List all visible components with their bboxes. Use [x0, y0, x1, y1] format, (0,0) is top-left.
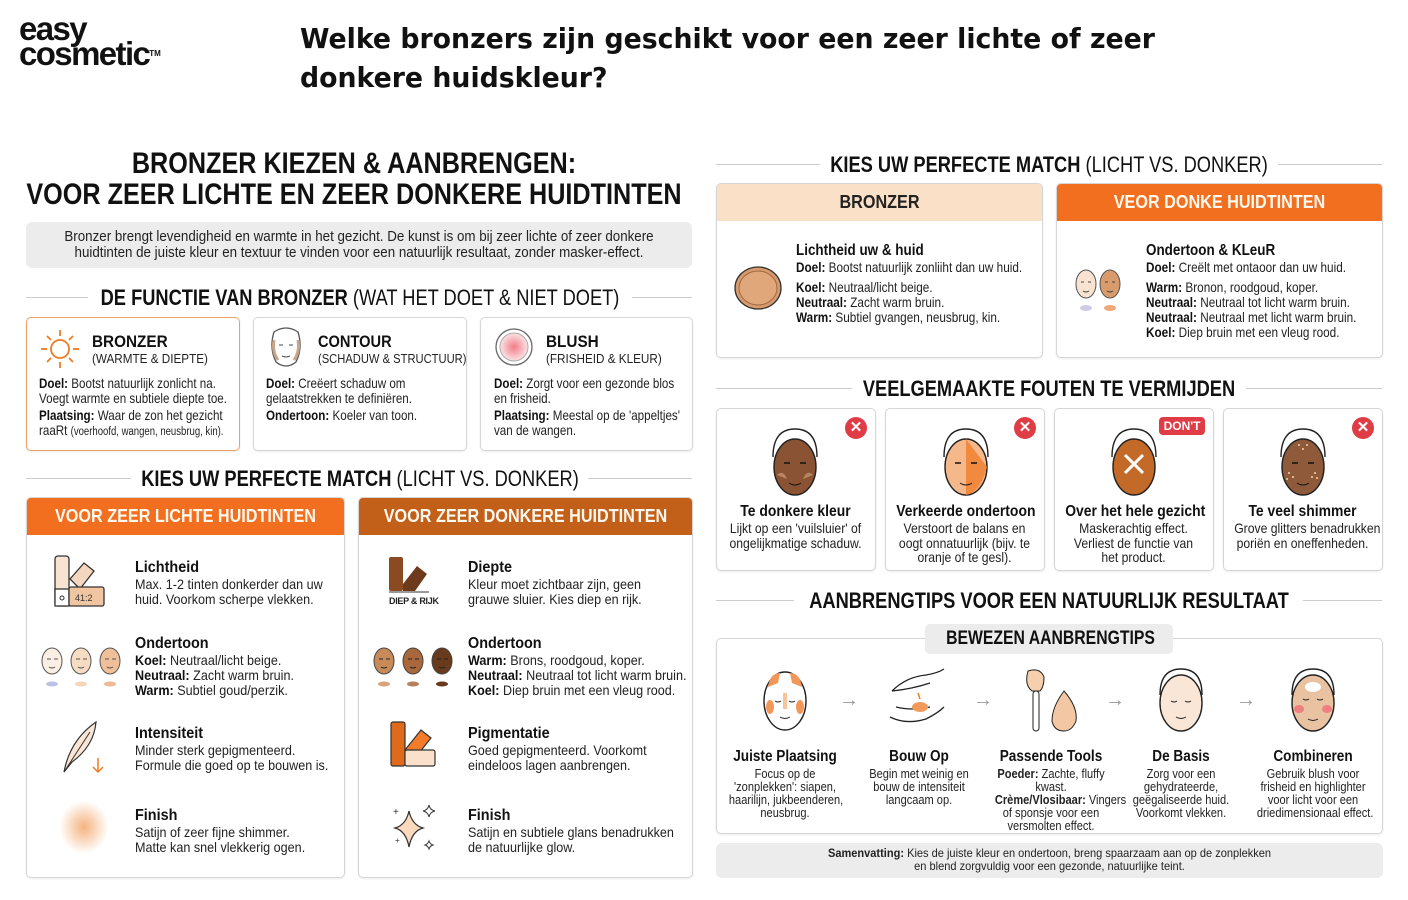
panel: bronzer match [716, 183, 1043, 358]
icon: orange face [943, 428, 989, 496]
panel: veor donke huidtinten: Ondertoon & KLeuR [1146, 242, 1275, 259]
panel: zeer lichte huidtinten: Ondertoon [135, 635, 209, 652]
icon: feather [63, 720, 104, 773]
page title: donkere huidskleur? [300, 61, 608, 94]
icon: bronzer compact [734, 266, 782, 310]
panel: zeer lichte huidtinten: Warm: Subtiel goud/perzik. [135, 682, 288, 698]
card: verkeerde ondertoon: Verstoort de balans en [904, 520, 1025, 536]
icon: dont badge: DON'T [1164, 419, 1200, 433]
arrow: → [839, 689, 859, 711]
panel: zeer lichte huidtinten: Lichtheid [135, 559, 199, 576]
arrow: → [1105, 689, 1125, 711]
icon: blush compact [495, 328, 533, 366]
panel: zeer lichte huidtinten [26, 497, 345, 878]
icon: orange swatch [390, 721, 436, 767]
panel: bewezen aanbrengtips: geëgaliseerde huid. [1133, 792, 1229, 807]
icon: three light faces [42, 648, 120, 686]
panel: zeer donkere huidtinten: eindeloos lagen aanbrengen. [468, 757, 631, 773]
heading: functie van bronzer: DE FUNCTIE VAN BRONZER (WAT HET DOET & NIET DOET) [101, 285, 619, 310]
card: over het hele gezicht: Maskerachtig effect. [1079, 520, 1188, 536]
icon: sparkles: + [393, 807, 399, 818]
panel: zeer lichte huidtinten: Minder sterk gepigmenteerd. [135, 742, 295, 758]
card: blush [480, 317, 693, 451]
heading: kies uw perfecte match (left): KIES UW PERFECTE MATCH (LICHT VS. DONKER) [141, 466, 579, 491]
panel: veor donke huidtinten: VEOR DONKE HUIDTINTEN [1114, 192, 1325, 212]
card: verkeerde ondertoon: oranje of te gesl). [917, 549, 1012, 565]
summary box [716, 843, 1383, 878]
card: contour: Ondertoon: Koeler van toon. [266, 407, 417, 423]
panel: zeer lichte huidtinten: Formule die goed op te bouwen is. [135, 757, 328, 773]
card: over het hele gezicht: het product. [1101, 549, 1166, 565]
panel: zeer donkere huidtinten: de natuurlijke glow. [468, 839, 575, 855]
heading: kies uw perfecte match (right): KIES UW PERFECTE MATCH (LICHT VS. DONKER) [830, 152, 1268, 177]
icon: three dark faces [374, 648, 452, 686]
panel: zeer lichte huidtinten: Koel: Neutraal/licht beige. [135, 652, 281, 668]
icon: sparkles: + [395, 836, 400, 845]
panel: veor donke huidtinten: Koel: Diep bruin met een vleug rood. [1146, 324, 1339, 340]
panel: bewezen aanbrengtips: Voorkomt vlekken. [1136, 805, 1226, 820]
panel: zeer lichte huidtinten: Max. 1-2 tinten donkerder dan uw [135, 576, 323, 592]
card: contour: gelaatstrekken te definiëren. [266, 390, 412, 406]
panel: bewezen aanbrengtips: voor licht voor een [1268, 792, 1358, 807]
panel: bewezen aanbrengtips: versmolten effect. [1007, 818, 1095, 833]
panel: bewezen aanbrengtips: Juiste Plaatsing [733, 748, 837, 765]
icon: dark swatch: DIEP & RIJK [389, 596, 440, 606]
page title [300, 22, 1155, 94]
card: te veel shimmer: poriën en oneffenheden. [1237, 534, 1368, 550]
card: te veel shimmer: Te veel shimmer [1248, 503, 1357, 520]
panel: bewezen aanbrengtips: haarilijn, jukbeenderen, [729, 792, 843, 807]
card: bronzer: Voegt warmte en subtiele diepte toe. [39, 390, 227, 406]
text: Bronzer brengt levendigheid en warmte in het gezicht. De kunst is om bij zeer lichte of zeer donkere [64, 228, 654, 245]
panel: zeer donkere huidtinten: Ondertoon [468, 635, 542, 652]
panel: bewezen aanbrengtips: driedimensionaal effect. [1257, 805, 1373, 820]
step: bouw op [890, 668, 944, 722]
panel: zeer donkere huidtinten: Pigmentatie [468, 725, 550, 742]
icon: two faces [1076, 270, 1120, 311]
icon: sun [41, 330, 79, 368]
arrow: → [1236, 689, 1256, 711]
panel: bronzer match: BRONZER [839, 192, 920, 212]
card: over het hele gezicht: Over het hele gezicht [1065, 503, 1205, 520]
panel: bewezen aanbrengtips: gehydrateerde, [1144, 779, 1218, 794]
main heading [26, 147, 682, 211]
panel: zeer donkere huidtinten: VOOR ZEER DONKERE HUIDTINTEN [384, 506, 667, 526]
card: blush: BLUSH [546, 332, 599, 351]
panel: bewezen aanbrengtips: Passende Tools [1000, 748, 1102, 765]
panel: zeer lichte huidtinten: Intensiteit [135, 725, 203, 742]
icon: dark face [772, 428, 818, 496]
icon: sparkles [392, 804, 436, 850]
panel: zeer donkere huidtinten [358, 497, 693, 878]
logo: cosmeticTM [19, 35, 161, 72]
logo: easy [19, 10, 86, 47]
main heading: BRONZER KIEZEN & AANBRENGEN: [132, 147, 576, 180]
panel: bewezen aanbrengtips: 'zonplekken': siapen, [734, 779, 836, 794]
icon: contour face [271, 327, 301, 367]
card: blush: van de wangen. [494, 422, 576, 438]
panel: zeer lichte huidtinten: Matte kan snel vlekkerig ogen. [135, 839, 305, 855]
panel: zeer lichte huidtinten: Satijn of zeer fijne shimmer. [135, 824, 290, 840]
icon: x badge: ✕ [1019, 419, 1031, 436]
panel: zeer donkere huidtinten: Diepte [468, 559, 512, 576]
tab heading [925, 624, 1173, 654]
card: te donkere kleur: Te donkere kleur [740, 503, 851, 520]
card: te veel shimmer: Grove glitters benadrukken [1234, 520, 1380, 536]
panel: bewezen aanbrengtips [716, 638, 1383, 834]
card: bronzer: Doel: Bootst natuurlijk zonlicht na. [39, 375, 216, 391]
icon: x badge [845, 417, 867, 439]
page title: Welke bronzers zijn geschikt voor een zeer lichte of zeer [300, 22, 1155, 55]
card: bronzer: BRONZER [92, 332, 168, 351]
panel: bewezen aanbrengtips: Focus op de [755, 766, 815, 781]
panel: bewezen aanbrengtips: kwast. [1035, 779, 1067, 794]
card: blush: Plaatsing: Meestal op de 'appeltjes' [494, 407, 680, 423]
tab heading: BEWEZEN AANBRENGTIPS [946, 628, 1155, 649]
card: te donkere kleur: Lijkt op een 'vuilsluier' of [730, 520, 861, 536]
card: contour: Doel: Creëert schaduw om [266, 375, 405, 391]
arrow: → [973, 689, 993, 711]
card: over het hele gezicht [1054, 408, 1214, 571]
panel: bewezen aanbrengtips: Zorg voor een [1147, 766, 1215, 781]
panel: bronzer match: Warm: Subtiel gvangen, neusbrug, kin. [796, 309, 1000, 325]
text: Samenvatting: Kies de juiste kleur en ondertoon, breng spaarzaam aan op de zonplekken [828, 846, 1271, 860]
panel: bewezen aanbrengtips: Bouw Op [889, 748, 949, 765]
icon: x badge: ✕ [850, 419, 862, 436]
icon: masked face [1111, 428, 1157, 496]
panel: veor donke huidtinten: Neutraal: Neutraal tot licht warm bruin. [1146, 294, 1350, 310]
panel: bewezen aanbrengtips: of sponsje voor een [1003, 805, 1099, 820]
icon: shimmer face [1280, 428, 1326, 496]
card: blush: Doel: Zorgt voor een gezonde blos [494, 375, 674, 391]
text: en blend zorgvuldig voor een gezonde, natuurlijke teint. [914, 859, 1185, 873]
panel: bronzer match: Doel: Bootst natuurlijk zonliiht dan uw huid. Koel: Neutraal/licht beige. [796, 259, 1022, 295]
panel: bewezen aanbrengtips: Crème/Vlosibaar: Vingers [995, 792, 1126, 807]
icon: finish glow [59, 800, 109, 854]
panel: bewezen aanbrengtips: neusbrug. [760, 805, 810, 820]
main heading: VOOR ZEER LICHTE EN ZEER DONKERE HUIDTINTEN [26, 178, 682, 211]
panel: bewezen aanbrengtips: frisheid en highlighter [1260, 779, 1366, 794]
card: verkeerde ondertoon: oogt onnatuurlijk (bijv. te [899, 534, 1030, 550]
panel: bewezen aanbrengtips: bouw de intensiteit [873, 779, 965, 794]
card: over het hele gezicht: Verliest de functie van [1074, 534, 1193, 550]
logo [19, 10, 161, 72]
card: te donkere kleur [716, 408, 876, 571]
intro text box [26, 222, 692, 268]
panel: zeer donkere huidtinten: Satijn en subtiele glans benadrukken [468, 824, 674, 840]
panel: veor donke huidtinten [1056, 183, 1383, 358]
card: blush: (FRISHEID & KLEUR) [546, 351, 662, 366]
text: huidtinten de juiste kleur en textuur te vinden voor een natuurlijk resultaat, zonder masker-effect. [75, 244, 643, 261]
panel: zeer lichte huidtinten: huid. Voorkom scherpe vlekken. [135, 591, 314, 607]
panel: zeer donkere huidtinten: Neutraal: Neutraal tot licht warm bruin. [468, 667, 686, 683]
heading: veelgemaakte fouten: VEELGEMAAKTE FOUTEN TE VERMIJDEN [863, 376, 1235, 401]
panel: zeer lichte huidtinten: VOOR ZEER LICHTE HUIDTINTEN [55, 506, 316, 526]
panel: bewezen aanbrengtips: Gebruik blush voor [1267, 766, 1359, 781]
panel: veor donke huidtinten: Neutraal: Neutraal met licht warm bruin. [1146, 309, 1356, 325]
panel: zeer donkere huidtinten: Warm: Brons, roodgoud, koper. [468, 652, 645, 668]
card: bronzer: (WARMTE & DIEPTE) [92, 351, 208, 366]
step: juiste plaatsing [763, 671, 807, 731]
panel: bronzer match: Lichtheid uw & huid [796, 242, 924, 259]
panel: zeer lichte huidtinten: Finish [135, 807, 177, 824]
icon: x badge [1014, 417, 1036, 439]
step: combineren [1291, 668, 1335, 732]
card: bronzer: Plaatsing: Waar de zon het gezicht [39, 407, 223, 423]
card: verkeerde ondertoon: Verkeerde ondertoon [896, 503, 1035, 520]
panel: zeer donkere huidtinten: Goed gepigmenteerd. Voorkomt [468, 742, 647, 758]
icon: dark swatch [389, 557, 440, 606]
panel: zeer donkere huidtinten: Koel: Diep bruin met een vleug rood. [468, 682, 675, 698]
icon: dont badge [1159, 417, 1205, 435]
step: passende tools [1026, 669, 1077, 732]
panel: bewezen aanbrengtips: Begin met weinig en [869, 766, 969, 781]
card: contour: CONTOUR [318, 332, 392, 351]
step: de basis [1159, 668, 1203, 732]
panel: bewezen aanbrengtips: langcaam op. [886, 792, 952, 807]
card: bronzer [26, 317, 240, 451]
icon: x badge: ✕ [1357, 419, 1369, 436]
panel: bronzer match: Neutraal: Zacht warm bruin. [796, 294, 944, 310]
panel: veor donke huidtinten: Doel: Creëlt met ontaoor dan uw huid. Warm: Bronon, roodgoud, koper. [1146, 259, 1346, 295]
card: te donkere kleur: ongelijkmatige schaduw. [729, 534, 862, 550]
icon: light swatch [54, 555, 105, 607]
panel: bewezen aanbrengtips: Poeder: Zachte, fluffy [997, 766, 1105, 781]
heading: aanbrengtips: AANBRENGTIPS VOOR EEN NATUURLIJK RESULTAAT [809, 588, 1289, 613]
card: bronzer: raaRt (voerhoofd, wangen, neusbrug, kin). [39, 422, 223, 438]
card: verkeerde ondertoon [885, 408, 1045, 571]
panel: bewezen aanbrengtips: Combineren [1273, 748, 1353, 765]
panel: zeer lichte huidtinten: Neutraal: Zacht warm bruin. [135, 667, 294, 683]
card: contour [253, 317, 467, 451]
panel: zeer donkere huidtinten: Finish [468, 807, 510, 824]
panel: zeer donkere huidtinten: grauwe sluier. Kies diep en rijk. [468, 591, 642, 607]
icon: light swatch: 41:2 [75, 593, 93, 603]
card: blush: en frisheid. [494, 390, 551, 406]
icon: x badge [1352, 417, 1374, 439]
panel: zeer donkere huidtinten: Kleur moet zichtbaar zijn, geen [468, 576, 641, 592]
card: te veel shimmer [1223, 408, 1383, 571]
card: contour: (SCHADUW & STRUCTUUR) [318, 351, 466, 366]
panel: bewezen aanbrengtips: De Basis [1152, 748, 1210, 765]
